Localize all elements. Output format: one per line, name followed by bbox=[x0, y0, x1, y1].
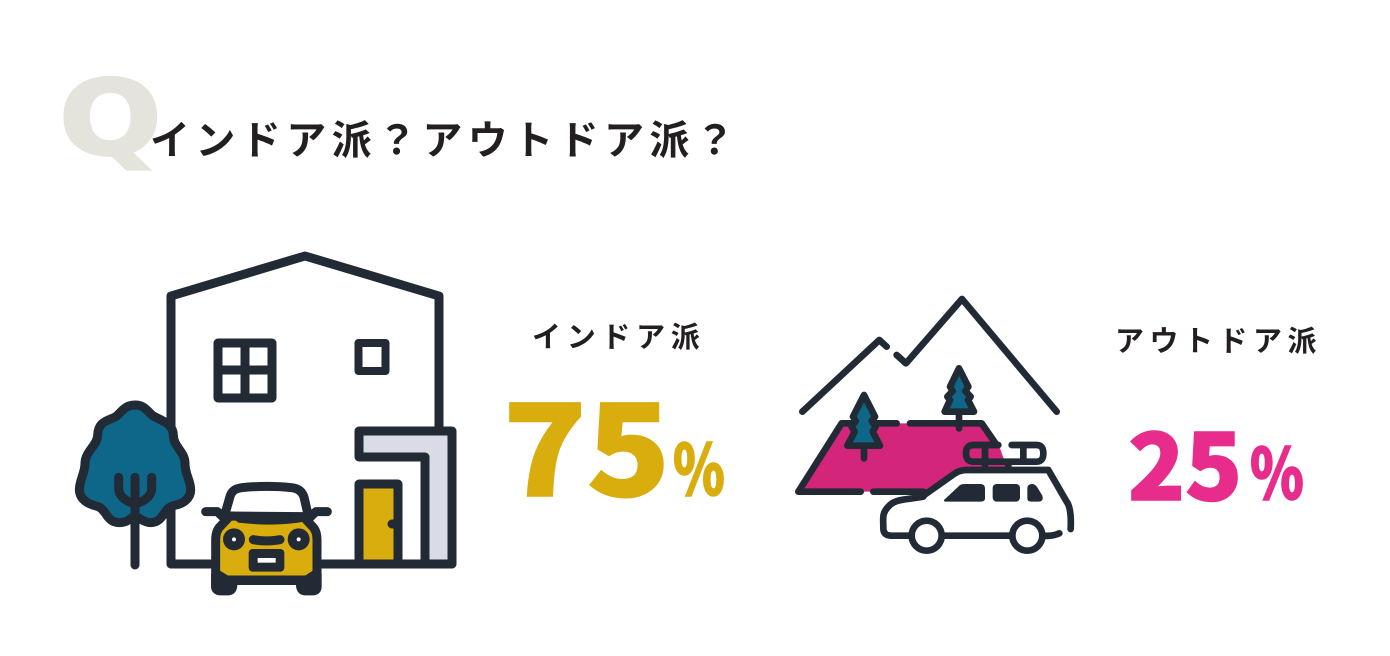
pink campsite bbox=[798, 423, 1007, 492]
number 25: 25 bbox=[1128, 395, 1242, 527]
car side bbox=[883, 470, 1071, 551]
car front bbox=[206, 486, 327, 595]
large window bbox=[218, 343, 272, 398]
campsite outline bbox=[798, 423, 997, 492]
house outline bbox=[171, 256, 439, 564]
door bbox=[359, 484, 398, 564]
door knob bbox=[392, 520, 397, 528]
percent sign: % bbox=[673, 414, 725, 515]
pine tree left bbox=[847, 395, 880, 458]
small window bbox=[358, 343, 386, 371]
value: indoor 75% bbox=[503, 351, 725, 532]
illustration: mountains, forest and car bbox=[798, 299, 1071, 551]
pine tree right bbox=[945, 368, 974, 428]
label: indoor: インドア派 bbox=[532, 314, 706, 356]
roof rack bbox=[966, 445, 1043, 470]
tree bbox=[79, 405, 191, 565]
illustration: house, tree and car bbox=[79, 256, 452, 595]
value: outdoor 25% bbox=[1128, 395, 1304, 527]
number 75: 75 bbox=[503, 351, 670, 532]
carport bbox=[359, 431, 452, 564]
question text: インドア派？アウトドア派？ bbox=[150, 108, 740, 166]
heading: question bbox=[59, 58, 740, 179]
mountains bbox=[802, 299, 1057, 412]
percent sign: % bbox=[1250, 419, 1304, 520]
ground line bbox=[171, 560, 452, 568]
decorative letter Q: Q bbox=[59, 58, 162, 179]
label: outdoor: アウトドア派 bbox=[1115, 318, 1322, 360]
